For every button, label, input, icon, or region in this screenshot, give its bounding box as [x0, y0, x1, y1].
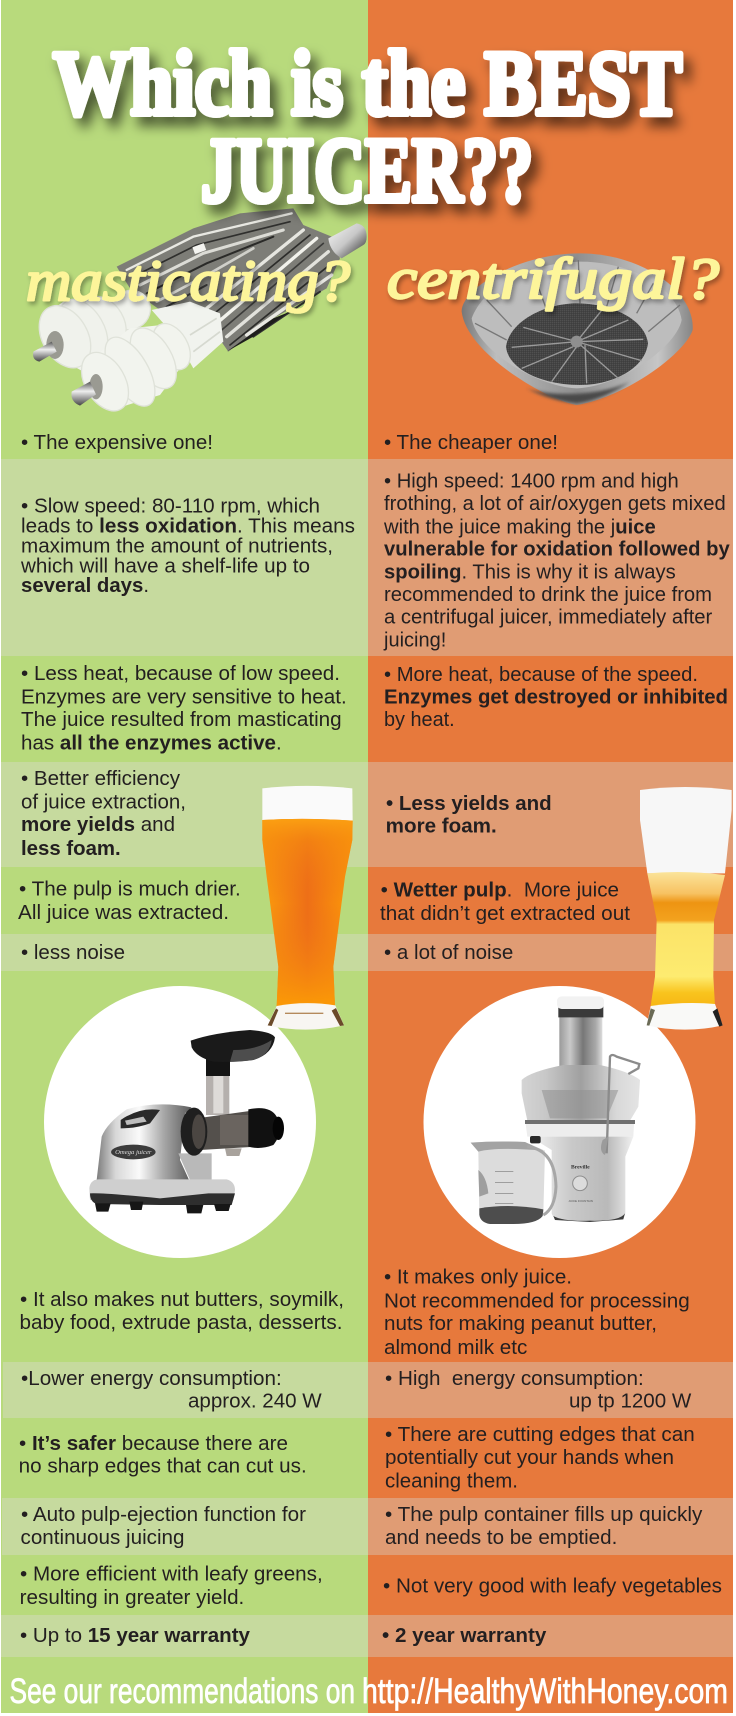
- text: expensive: • The expensive one!: [21, 432, 213, 454]
- text: better efficiency: more yields and: [21, 814, 175, 836]
- icon: glass of orange juice with little foam: [262, 786, 353, 1030]
- icon: Breville centrifugal juicer: JUICE FOUNTAIN: [568, 1199, 593, 1203]
- text: safer: no sharp edges that can cut us.: [19, 1456, 307, 1478]
- text: less heat: [21, 663, 347, 754]
- text: high speed: • High speed: 1400 rpm and high: [384, 471, 679, 493]
- text: more heat: Enzymes get destroyed or inhibited: [384, 686, 728, 708]
- text: high speed: with the juice making the juice: [383, 516, 656, 538]
- text: less yields: more foam.: [386, 816, 497, 838]
- text: auto pulp ejection: [20, 1504, 306, 1549]
- text: leafy greens: [20, 1564, 323, 1609]
- text: lower energy: [21, 1368, 323, 1413]
- text: cutting edges: potentially cut your hands when: [385, 1447, 674, 1469]
- text: slow speed: [20, 496, 355, 597]
- icon: Omega masticating juicer: Omega juicer: [115, 1149, 152, 1156]
- text: better efficiency: of juice extraction,: [21, 791, 186, 813]
- text: cutting edges: [385, 1424, 695, 1493]
- text: more heat: by heat.: [384, 709, 455, 731]
- right column text: [380, 432, 730, 1647]
- icon: glass of centrifugal juice with much foam: [640, 787, 732, 1030]
- text: slow speed: several days.: [21, 575, 149, 597]
- text: high speed: juicing!: [383, 630, 446, 652]
- text: cutting edges: cleaning them.: [385, 1471, 518, 1493]
- text: pulp container: [385, 1504, 703, 1549]
- text: 2 year warranty: • 2 year warranty: [382, 1625, 547, 1647]
- text: slow speed: which will have a shelf-life up to: [20, 555, 310, 577]
- text: only juice: • It makes only juice.: [384, 1266, 572, 1288]
- panel: masticating column background: [1, 0, 368, 1713]
- right circle with Breville juicer: [424, 986, 696, 1258]
- text: high speed: [383, 471, 730, 652]
- text: drier pulp: [18, 879, 241, 924]
- text: only juice: almond milk etc: [384, 1337, 527, 1359]
- left column text: [18, 432, 355, 1647]
- icon: Breville centrifugal juicer: Breville: [571, 1165, 590, 1171]
- text: wetter pulp: • Wetter pulp. More juice: [381, 880, 619, 902]
- text: nut butters: [20, 1289, 344, 1334]
- text: high speed: vulnerable for oxidation followed by: [384, 539, 730, 561]
- text: less heat: Enzymes are very sensitive to heat.: [21, 686, 347, 708]
- left circle with Omega juicer: [44, 986, 316, 1258]
- text: less heat: has all the enzymes active.: [21, 732, 282, 754]
- icon: centrifugal juicer basket: [462, 253, 693, 405]
- text: drier pulp: • The pulp is much drier.: [19, 879, 241, 901]
- text: pulp container: • The pulp container fills up quickly: [385, 1504, 703, 1526]
- heading: centrifugal: centrifugal?: [387, 246, 719, 311]
- title line 2: JUICER??: [201, 119, 533, 221]
- text: more heat: [384, 664, 728, 731]
- text: leafy greens: • More efficient with leafy greens,: [20, 1564, 323, 1586]
- text: cheaper: • The cheaper one!: [384, 432, 558, 454]
- text: high energy: • High energy consumption:: [385, 1368, 644, 1390]
- icon: twin gear augers: [29, 208, 367, 419]
- heading: masticating: masticating?: [26, 248, 350, 313]
- text: warranty: • Up to 15 year warranty: [20, 1625, 251, 1647]
- text: lower energy: approx. 240 W: [188, 1391, 323, 1413]
- text: less heat: The juice resulted from masticating: [21, 709, 342, 731]
- text: better efficiency: [21, 768, 186, 860]
- text: drier pulp: All juice was extracted.: [18, 902, 229, 924]
- text: high energy: up tp 1200 W: [569, 1391, 692, 1413]
- text: less heat: • Less heat, because of low speed.: [21, 663, 340, 685]
- text: safer: • It’s safer because there are: [19, 1433, 288, 1455]
- text: leafy greens: resulting in greater yield.: [20, 1587, 244, 1609]
- text: high speed: frothing, a lot of air/oxygen gets mixed: [384, 493, 726, 515]
- text: leafy vegetables: • Not very good with leafy vegetables: [383, 1576, 722, 1598]
- text: wetter pulp: [380, 880, 630, 925]
- text: lower energy: •Lower energy consumption:: [21, 1368, 282, 1390]
- text: a lot of noise: • a lot of noise: [384, 942, 513, 964]
- title: [53, 32, 682, 221]
- text: less yields: [386, 793, 552, 838]
- footer link line: See our recommendations on: [10, 1672, 355, 1711]
- text: nut butters: • It also makes nut butters, soymilk,: [20, 1289, 344, 1311]
- text: better efficiency: • Better efficiency: [21, 768, 181, 790]
- text: only juice: nuts for making peanut butter,: [384, 1313, 657, 1335]
- text: high speed: a centrifugal juicer, immediately after: [384, 606, 713, 628]
- text: high energy: [385, 1368, 692, 1413]
- panel: centrifugal column background: [368, 0, 733, 1713]
- text: high speed: recommended to drink the juice from: [384, 584, 712, 606]
- text: high speed: spoiling. This is why it is always: [384, 561, 676, 583]
- footer link line: [10, 1672, 728, 1711]
- row bands: right column: [368, 459, 733, 1657]
- text: less yields: • Less yields and: [386, 793, 552, 815]
- row bands: left column: [1, 459, 368, 1657]
- text: less noise: • less noise: [21, 942, 125, 964]
- text: slow speed: • Slow speed: 80-110 rpm, which: [21, 496, 320, 518]
- icon: Omega masticating juicer: [89, 1030, 284, 1213]
- text: better efficiency: less foam.: [21, 838, 121, 860]
- text: nut butters: baby food, extrude pasta, desserts.: [20, 1312, 343, 1334]
- text: slow speed: leads to less oxidation. This means: [21, 516, 355, 538]
- text: only juice: [384, 1266, 690, 1359]
- text: auto pulp ejection: continuous juicing: [20, 1527, 184, 1549]
- text: slow speed: maximum the amount of nutrients,: [21, 536, 333, 558]
- text: auto pulp ejection: • Auto pulp-ejection function for: [21, 1504, 306, 1526]
- text: only juice: Not recommended for processing: [384, 1290, 690, 1312]
- text: pulp container: and needs to be emptied.: [385, 1527, 617, 1549]
- text: cutting edges: • There are cutting edges that can: [385, 1424, 695, 1446]
- text: wetter pulp: that didn’t get extracted out: [380, 903, 630, 925]
- icon: Breville centrifugal juicer: [471, 996, 640, 1224]
- text: safer: [19, 1433, 307, 1478]
- text: more heat: • More heat, because of the speed.: [384, 664, 698, 686]
